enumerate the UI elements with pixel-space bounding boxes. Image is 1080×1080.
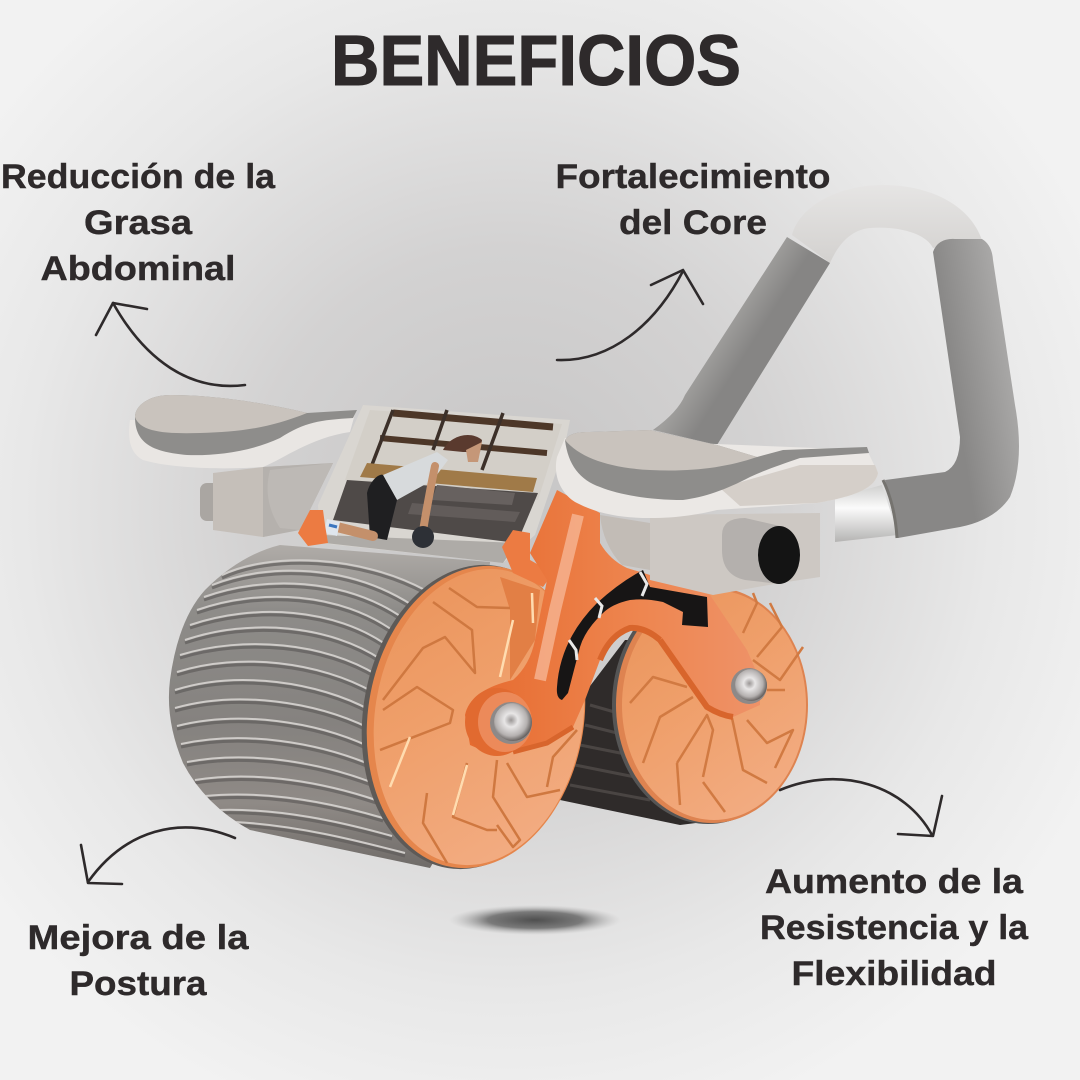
label: Mejora de la Postura: Mejora de la — [28, 919, 250, 957]
title: BENEFICIOS — [331, 22, 741, 101]
handle bar — [653, 185, 1019, 542]
floor shadow — [449, 905, 621, 935]
label: Aumento de la Resistencia y la Flexibilidad — [760, 863, 1029, 993]
arrow: to Reducción de la Grasa Abdominal — [96, 303, 245, 386]
label: Reducción de la Grasa Abdominal: Reducción de la — [1, 158, 276, 196]
label: Aumento de la Resistencia y la Flexibilidad: Aumento de la — [765, 863, 1024, 901]
left pad block — [200, 463, 333, 537]
product: ab roller — [129, 185, 1019, 885]
sofa — [333, 480, 538, 543]
left knee pad — [129, 395, 357, 468]
label: Aumento de la Resistencia y la Flexibilidad: Resistencia y la — [760, 909, 1029, 947]
label: Mejora de la Postura — [28, 919, 250, 1003]
label: Reducción de la Grasa Abdominal: Grasa — [84, 204, 193, 242]
arrow: to Fortalecimiento del Core — [557, 270, 703, 360]
label: Reducción de la Grasa Abdominal: Abdominal — [40, 250, 236, 288]
label: Aumento de la Resistencia y la Flexibilidad: Flexibilidad — [792, 955, 996, 993]
exercise figure — [324, 435, 482, 548]
label: Fortalecimiento del Core: del Core — [619, 204, 767, 242]
right knee pad — [556, 430, 878, 518]
arrow: to Aumento de la Resistencia — [780, 779, 942, 836]
label: Mejora de la Postura: Postura — [70, 965, 208, 1003]
right pad block and knob — [600, 513, 820, 595]
orange frame arm — [465, 490, 760, 755]
axle bolts — [465, 668, 767, 756]
arrow: to Mejora de la Postura — [81, 828, 235, 884]
label: Fortalecimiento del Core: Fortalecimiento — [556, 158, 830, 196]
phone holder hooks — [298, 510, 553, 587]
rear wheel cylinder — [560, 640, 720, 825]
label: Reducción de la Grasa Abdominal — [1, 158, 276, 288]
rear wheel disk — [612, 586, 808, 824]
front wheel disk — [340, 549, 606, 885]
front wheel cylinder with ribs — [169, 545, 490, 868]
wall and shelves — [345, 410, 562, 500]
phone with exercise scene — [318, 405, 570, 563]
floor — [323, 535, 517, 563]
black slot with chevrons — [557, 570, 708, 700]
label: Fortalecimiento del Core — [556, 158, 830, 242]
